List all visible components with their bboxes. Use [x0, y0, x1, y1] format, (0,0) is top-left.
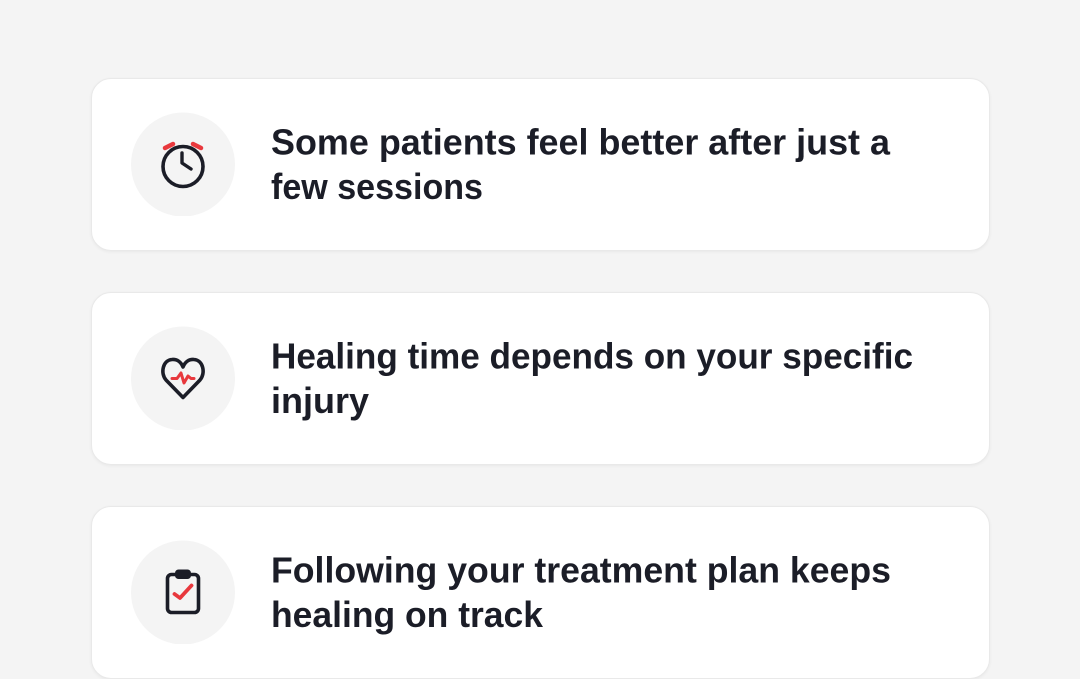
text: card 3: Following your treatment plan keeps: [271, 550, 891, 590]
text: card 3: healing on track: [271, 594, 544, 635]
text: card 2: Healing time depends on your specific: [271, 336, 913, 376]
text: card 1: few sessions: [271, 166, 483, 207]
icon: heart with pulse: [131, 326, 235, 430]
text: card 3: [271, 550, 891, 635]
panel: card 1: [91, 78, 990, 251]
panel: card 2: [91, 292, 990, 465]
text: card 2: injury: [271, 380, 369, 421]
panel: card 3: [91, 506, 990, 679]
icon: alarm clock: [131, 112, 235, 216]
text: card 1: [271, 122, 891, 207]
text: card 2: [271, 336, 913, 421]
text: card 1: Some patients feel better after just a: [271, 122, 891, 162]
icon: clipboard with check: [131, 540, 235, 644]
